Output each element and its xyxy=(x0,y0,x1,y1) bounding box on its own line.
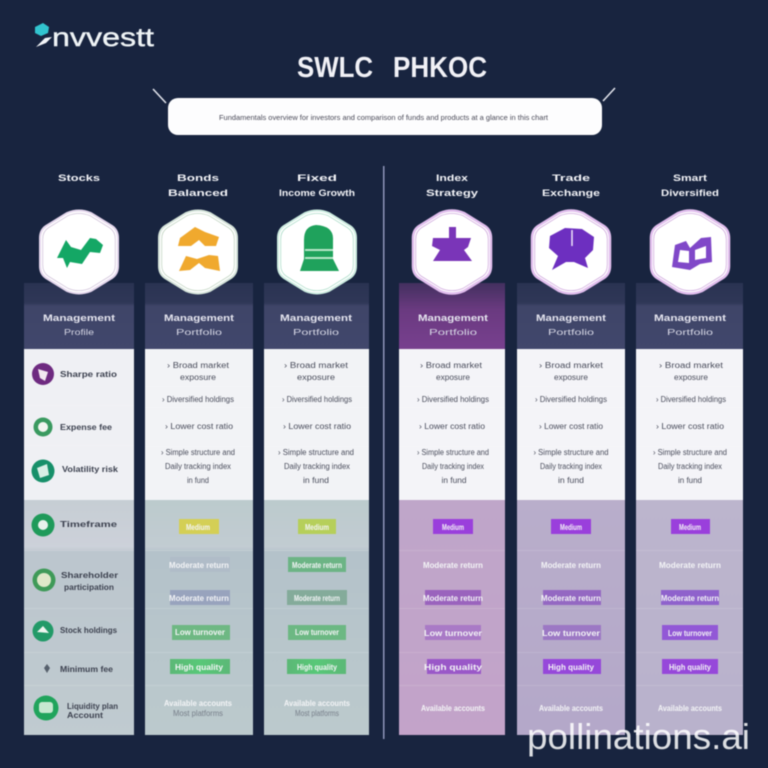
logo wordmark: nvvestt xyxy=(52,22,155,52)
column 2 tinted rows xyxy=(145,500,253,735)
panel: column 5 xyxy=(517,283,625,735)
icon: green stacked badge xyxy=(278,210,356,294)
list text column 6: › Simple structure and xyxy=(653,448,727,457)
icon: purple row badge xyxy=(32,363,54,385)
row labels column 1: Expense fee xyxy=(60,423,113,432)
panel: column 2 xyxy=(145,283,253,735)
rating pills column 5 xyxy=(539,519,603,713)
banner tick right xyxy=(603,88,615,101)
rating pills column 2 xyxy=(164,519,233,718)
rating pills column 3 xyxy=(284,519,350,718)
icon: green tinted row badge 3 xyxy=(32,620,54,642)
rating pills column 4: High quality xyxy=(424,663,483,672)
panel: column 4: Portfolio xyxy=(429,328,478,337)
column 5 header xyxy=(517,283,625,349)
column 2 white rows xyxy=(145,349,253,500)
list text column 3: in fund xyxy=(303,476,329,485)
row labels column 1: Minimum fee xyxy=(60,665,114,674)
column 1 tinted rows xyxy=(24,500,134,735)
icon: purple open book badge xyxy=(651,210,729,294)
rating pills column 3: Moderate return xyxy=(294,594,340,603)
list text column 5: in fund xyxy=(558,476,584,485)
subtitle banner xyxy=(168,98,602,135)
list text column 6: exposure xyxy=(674,373,709,382)
icon: logo gem xyxy=(35,23,52,47)
column 4 header xyxy=(399,283,505,349)
rating pills column 2: Moderate return xyxy=(169,561,229,570)
list text column 2: › Simple structure and xyxy=(161,448,235,457)
list text column 2: Daily tracking index xyxy=(165,462,231,471)
yellow pill xyxy=(179,519,219,534)
column headings: Diversified xyxy=(661,188,719,198)
list text column 4: in fund xyxy=(442,476,466,485)
panel: column 5: Portfolio xyxy=(548,328,595,337)
rating pills column 5: Available accounts xyxy=(539,704,603,713)
title xyxy=(297,52,487,84)
list text column 4: Daily tracking index xyxy=(422,462,484,471)
icon: purple flower badge xyxy=(532,210,610,294)
panel: column 1 xyxy=(24,283,134,735)
list text column 5: exposure xyxy=(554,373,589,382)
rating pills column 6: Medium xyxy=(679,523,701,532)
column headings: Strategy xyxy=(426,188,478,198)
rating pills column 5: Low turnover xyxy=(542,629,600,638)
panel: column 4 xyxy=(399,283,505,735)
list text column 4: › Broad market xyxy=(420,361,483,370)
banner tick left xyxy=(153,89,166,103)
list text column 2: in fund xyxy=(187,476,209,485)
list text column 5 xyxy=(534,361,608,485)
list text column 5: Daily tracking index xyxy=(540,462,602,471)
column 6 header xyxy=(636,283,743,349)
list text column 6: in fund xyxy=(678,476,702,485)
row icons column 1 xyxy=(32,363,58,720)
rating pills column 4 xyxy=(421,519,485,713)
rating pills column 4: Available accounts xyxy=(421,704,485,713)
column headings: Income Growth xyxy=(279,188,355,198)
row labels column 1: participation xyxy=(64,583,114,592)
purple pill xyxy=(671,519,710,534)
list text column 6 xyxy=(653,361,727,485)
list text column 4 xyxy=(417,361,489,485)
rating pills column 4: Medium xyxy=(442,523,464,532)
purple pill xyxy=(433,519,473,534)
column headings: Exchange xyxy=(542,188,600,198)
panel: column 3 xyxy=(264,283,369,735)
title: PHKOC xyxy=(393,52,487,84)
logo xyxy=(35,22,155,52)
panel: column 4: Management xyxy=(418,313,488,323)
list text column 6: Daily tracking index xyxy=(658,462,722,471)
rating pills column 5: Moderate return xyxy=(541,594,601,603)
icon: green row badge xyxy=(34,418,52,436)
list text column 2: › Lower cost ratio xyxy=(165,422,234,431)
rating pills column 2: Medium xyxy=(186,523,210,532)
column 1 white rows xyxy=(24,349,134,500)
rating pills column 3: Medium xyxy=(305,523,329,532)
row labels column 1: Volatility risk xyxy=(62,465,119,474)
rating pills column 5: High quality xyxy=(548,663,595,672)
rating pills column 2: Low turnover xyxy=(175,628,225,637)
column headings: Balanced xyxy=(168,188,228,198)
subtitle banner: Fundamentals overview for investors and comparison of funds and products at a glance in this chart xyxy=(219,113,549,122)
list text column 4: exposure xyxy=(436,373,471,382)
panel: column 2: Portfolio xyxy=(176,328,223,337)
icon: green tinted row badge 2 xyxy=(32,568,56,592)
column headings xyxy=(58,173,719,198)
list text column 2: › Broad market xyxy=(167,361,230,370)
list text column 3: › Broad market xyxy=(284,361,349,370)
rating pills column 2: Moderate return xyxy=(169,594,229,603)
column 3 tinted rows xyxy=(264,500,369,735)
rating pills column 6: High quality xyxy=(669,663,712,672)
column 6 white rows xyxy=(636,349,743,500)
rating pills column 5: Moderate return xyxy=(541,561,601,570)
yellow-green pill xyxy=(298,519,336,534)
list text column 2: exposure xyxy=(180,373,217,382)
list text column 3: › Diversified holdings xyxy=(282,395,352,404)
column headings: Trade xyxy=(552,173,590,183)
rating pills column 3: Most platforms xyxy=(295,709,339,718)
rating pills column 2: High quality xyxy=(175,663,224,672)
row labels column 1: Timeframe xyxy=(60,520,118,529)
column 4 white rows xyxy=(399,349,505,500)
watermark: pollinations.ai xyxy=(527,716,750,757)
row labels column 1: Shareholder xyxy=(61,571,118,580)
column 1 header xyxy=(24,283,134,349)
column 3 header xyxy=(264,283,369,349)
icon: teal row badge xyxy=(32,460,54,482)
panel: column 1: Management xyxy=(43,313,115,323)
row labels column 1: Account xyxy=(67,711,103,720)
column 5 white rows xyxy=(517,349,625,500)
row labels column 1: Liquidity plan xyxy=(67,702,118,711)
list text column 6: › Lower cost ratio xyxy=(656,422,725,431)
column headings: Smart xyxy=(673,173,707,183)
rating pills column 4: Low turnover xyxy=(424,629,482,638)
rating pills column 3: Low turnover xyxy=(295,628,339,637)
column 4 tinted rows xyxy=(399,500,505,735)
icon: chat badge xyxy=(34,696,58,720)
column headings: Fixed xyxy=(297,173,337,183)
icon: small star xyxy=(44,664,50,673)
column 6 tinted rows xyxy=(636,500,743,735)
title: SWLC xyxy=(297,52,373,84)
rating pills column 5: Medium xyxy=(560,523,582,532)
list text column 3: › Lower cost ratio xyxy=(283,422,352,431)
list text column 2: › Diversified holdings xyxy=(162,395,234,404)
panel: column 2: Management xyxy=(164,313,234,323)
rating pills column 2: Available accounts xyxy=(164,699,233,708)
list text column 2 xyxy=(161,361,235,485)
list text column 4: › Simple structure and xyxy=(417,448,489,457)
list text column 6: › Diversified holdings xyxy=(656,395,726,404)
icon: green trend badge xyxy=(40,210,118,294)
rating pills column 6 xyxy=(658,519,722,713)
icon: green tinted row badge 1 xyxy=(32,514,54,536)
column 5 tinted rows xyxy=(517,500,625,735)
list text column 5: › Lower cost ratio xyxy=(539,422,604,431)
list text column 6: › Broad market xyxy=(659,361,724,370)
column headings: Stocks xyxy=(58,173,100,183)
purple pill xyxy=(551,519,591,534)
panel: column 1: Profile xyxy=(64,328,95,337)
rating pills column 3: Moderate return xyxy=(292,561,342,570)
rating pills column 4: Moderate return xyxy=(423,561,483,570)
rating pills column 6: Moderate return xyxy=(661,594,719,603)
panel: column 3: Portfolio xyxy=(293,328,340,337)
rating pills column 6: Moderate return xyxy=(659,561,721,570)
row labels column 1: Sharpe ratio xyxy=(60,370,117,379)
rating pills column 6: Low turnover xyxy=(668,629,712,638)
list text column 4: › Lower cost ratio xyxy=(419,422,486,431)
panel: column 6: Management xyxy=(654,313,726,323)
panel: column 3: Management xyxy=(280,313,352,323)
column headings: Bonds xyxy=(177,173,219,183)
row labels column 1 xyxy=(60,370,119,720)
panel: column 6 xyxy=(636,283,743,735)
list text column 3: exposure xyxy=(297,373,336,382)
icon: purple plus badge xyxy=(413,210,491,294)
list text column 5: › Broad market xyxy=(539,361,604,370)
list text column 5: › Diversified holdings xyxy=(535,395,607,404)
column headings: Index xyxy=(436,173,468,183)
panel: column 5: Management xyxy=(536,313,606,323)
panel: column 6: Portfolio xyxy=(667,328,714,337)
list text column 5: › Simple structure and xyxy=(534,448,608,457)
rating pills column 2: Most platforms xyxy=(173,709,223,718)
column 3 white rows xyxy=(264,349,369,500)
row labels column 1: Stock holdings xyxy=(60,626,118,635)
icon: orange hourglass badge xyxy=(159,210,237,294)
rating pills column 3: High quality xyxy=(297,663,337,672)
rating pills column 4: Moderate return xyxy=(423,594,483,603)
list text column 3 xyxy=(278,361,354,485)
rating pills column 6: Available accounts xyxy=(658,704,722,713)
list text column 3: › Simple structure and xyxy=(278,448,354,457)
rating pills column 3: Available accounts xyxy=(284,699,350,708)
center divider xyxy=(383,166,384,739)
list text column 3: Daily tracking index xyxy=(284,462,350,471)
list text column 4: › Diversified holdings xyxy=(417,395,489,404)
column 2 header xyxy=(145,283,253,349)
